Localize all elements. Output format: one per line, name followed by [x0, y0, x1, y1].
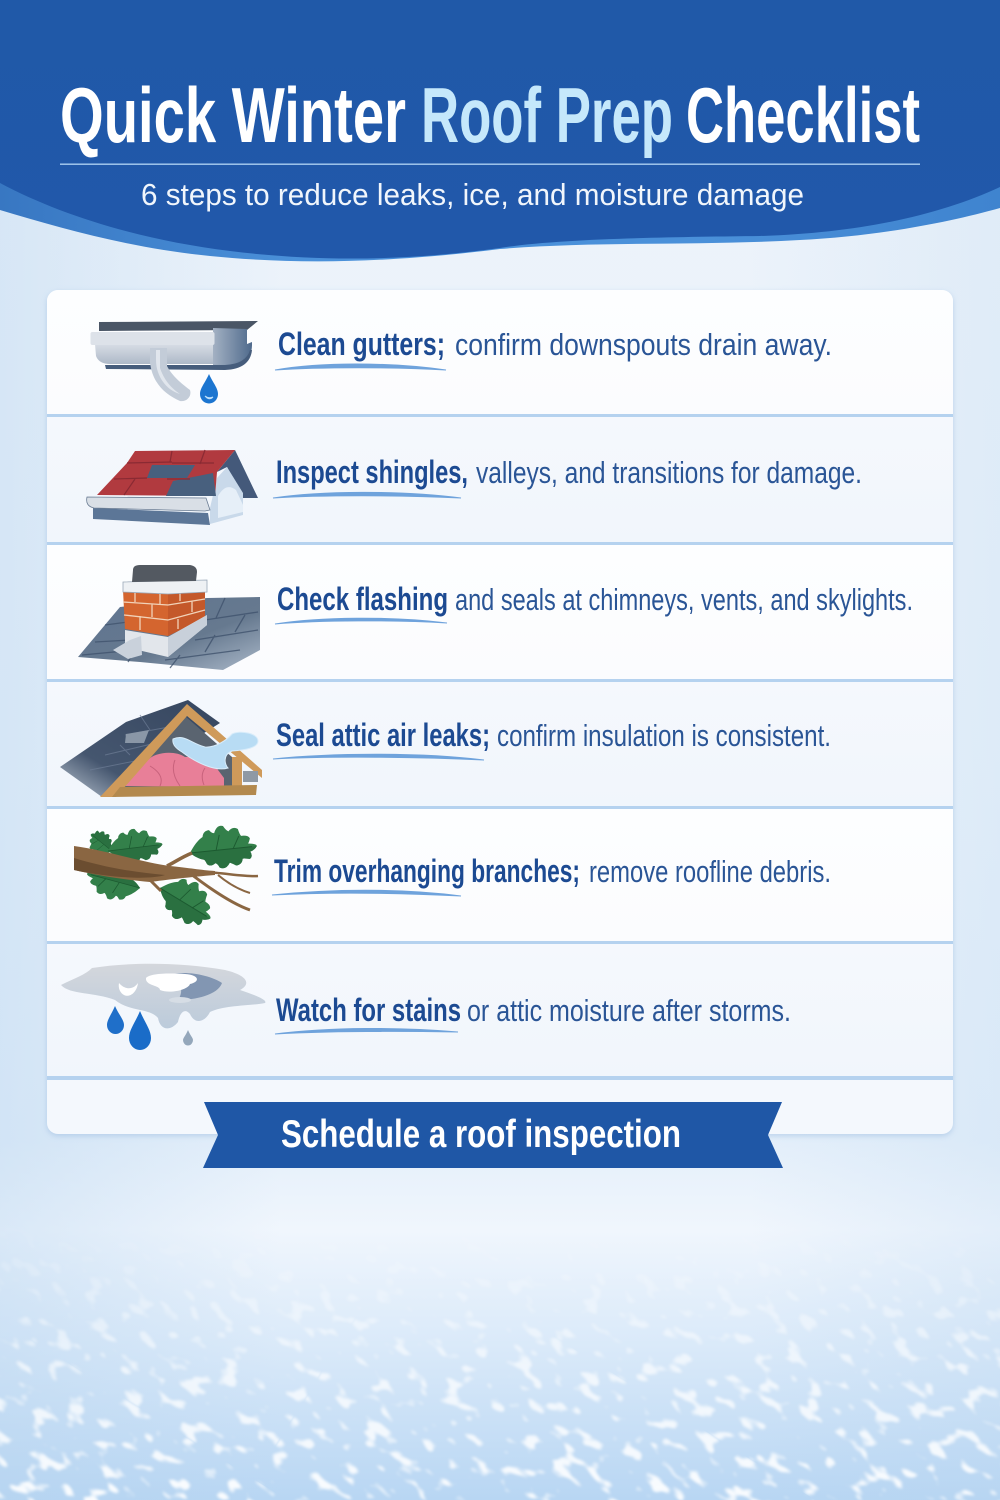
title: Roof Prep	[421, 71, 673, 159]
row 1: clean gutters	[47, 290, 953, 417]
step text 3	[275, 581, 913, 624]
icon: branch	[74, 822, 259, 934]
icon: water drop	[200, 374, 218, 404]
row 6: watch for stains	[47, 944, 953, 1080]
step text 5: remove roofline debris.	[589, 854, 831, 889]
step text 4	[273, 717, 831, 760]
icon: shingles	[87, 450, 258, 525]
step text 5	[272, 853, 831, 896]
icon: air leak	[173, 732, 258, 769]
checklist panel	[47, 290, 953, 1134]
icon: gutter	[90, 321, 258, 404]
step text 5: Trim overhanging branches;	[274, 853, 580, 889]
icon: water stain	[61, 964, 265, 1050]
snow texture	[0, 1282, 1000, 1500]
step text 1: Clean gutters;	[278, 326, 445, 362]
row 5: trim branches	[47, 809, 953, 944]
icon: water drops	[107, 1006, 124, 1034]
title: Quick Winter	[60, 71, 406, 159]
row 2: inspect shingles	[47, 417, 953, 545]
header banner	[0, 0, 1000, 261]
call to action ribbon	[203, 1102, 783, 1168]
step text 2: Inspect shingles,	[276, 454, 468, 490]
subtitle: 6 steps to reduce leaks, ice, and moisture damage	[141, 177, 804, 212]
step text 6	[275, 992, 791, 1034]
step text 4: Seal attic air leaks;	[276, 717, 490, 753]
step text 1: confirm downspouts drain away.	[455, 327, 832, 362]
step text 6: or attic moisture after storms.	[467, 993, 791, 1028]
call to action ribbon: Schedule a roof inspection	[281, 1113, 681, 1156]
step text 6: Watch for stains	[276, 992, 461, 1028]
row 3: check flashing	[47, 545, 953, 682]
step text 1	[275, 326, 832, 370]
title	[60, 71, 920, 159]
icon: chimney	[78, 565, 260, 670]
step text 4: confirm insulation is consistent.	[497, 718, 831, 753]
step text 2	[273, 454, 862, 498]
icon: attic	[60, 700, 262, 797]
step text 2: valleys, and transitions for damage.	[476, 455, 862, 490]
row 4: seal attic air leaks	[47, 682, 953, 809]
step text 3: Check flashing	[277, 581, 448, 617]
